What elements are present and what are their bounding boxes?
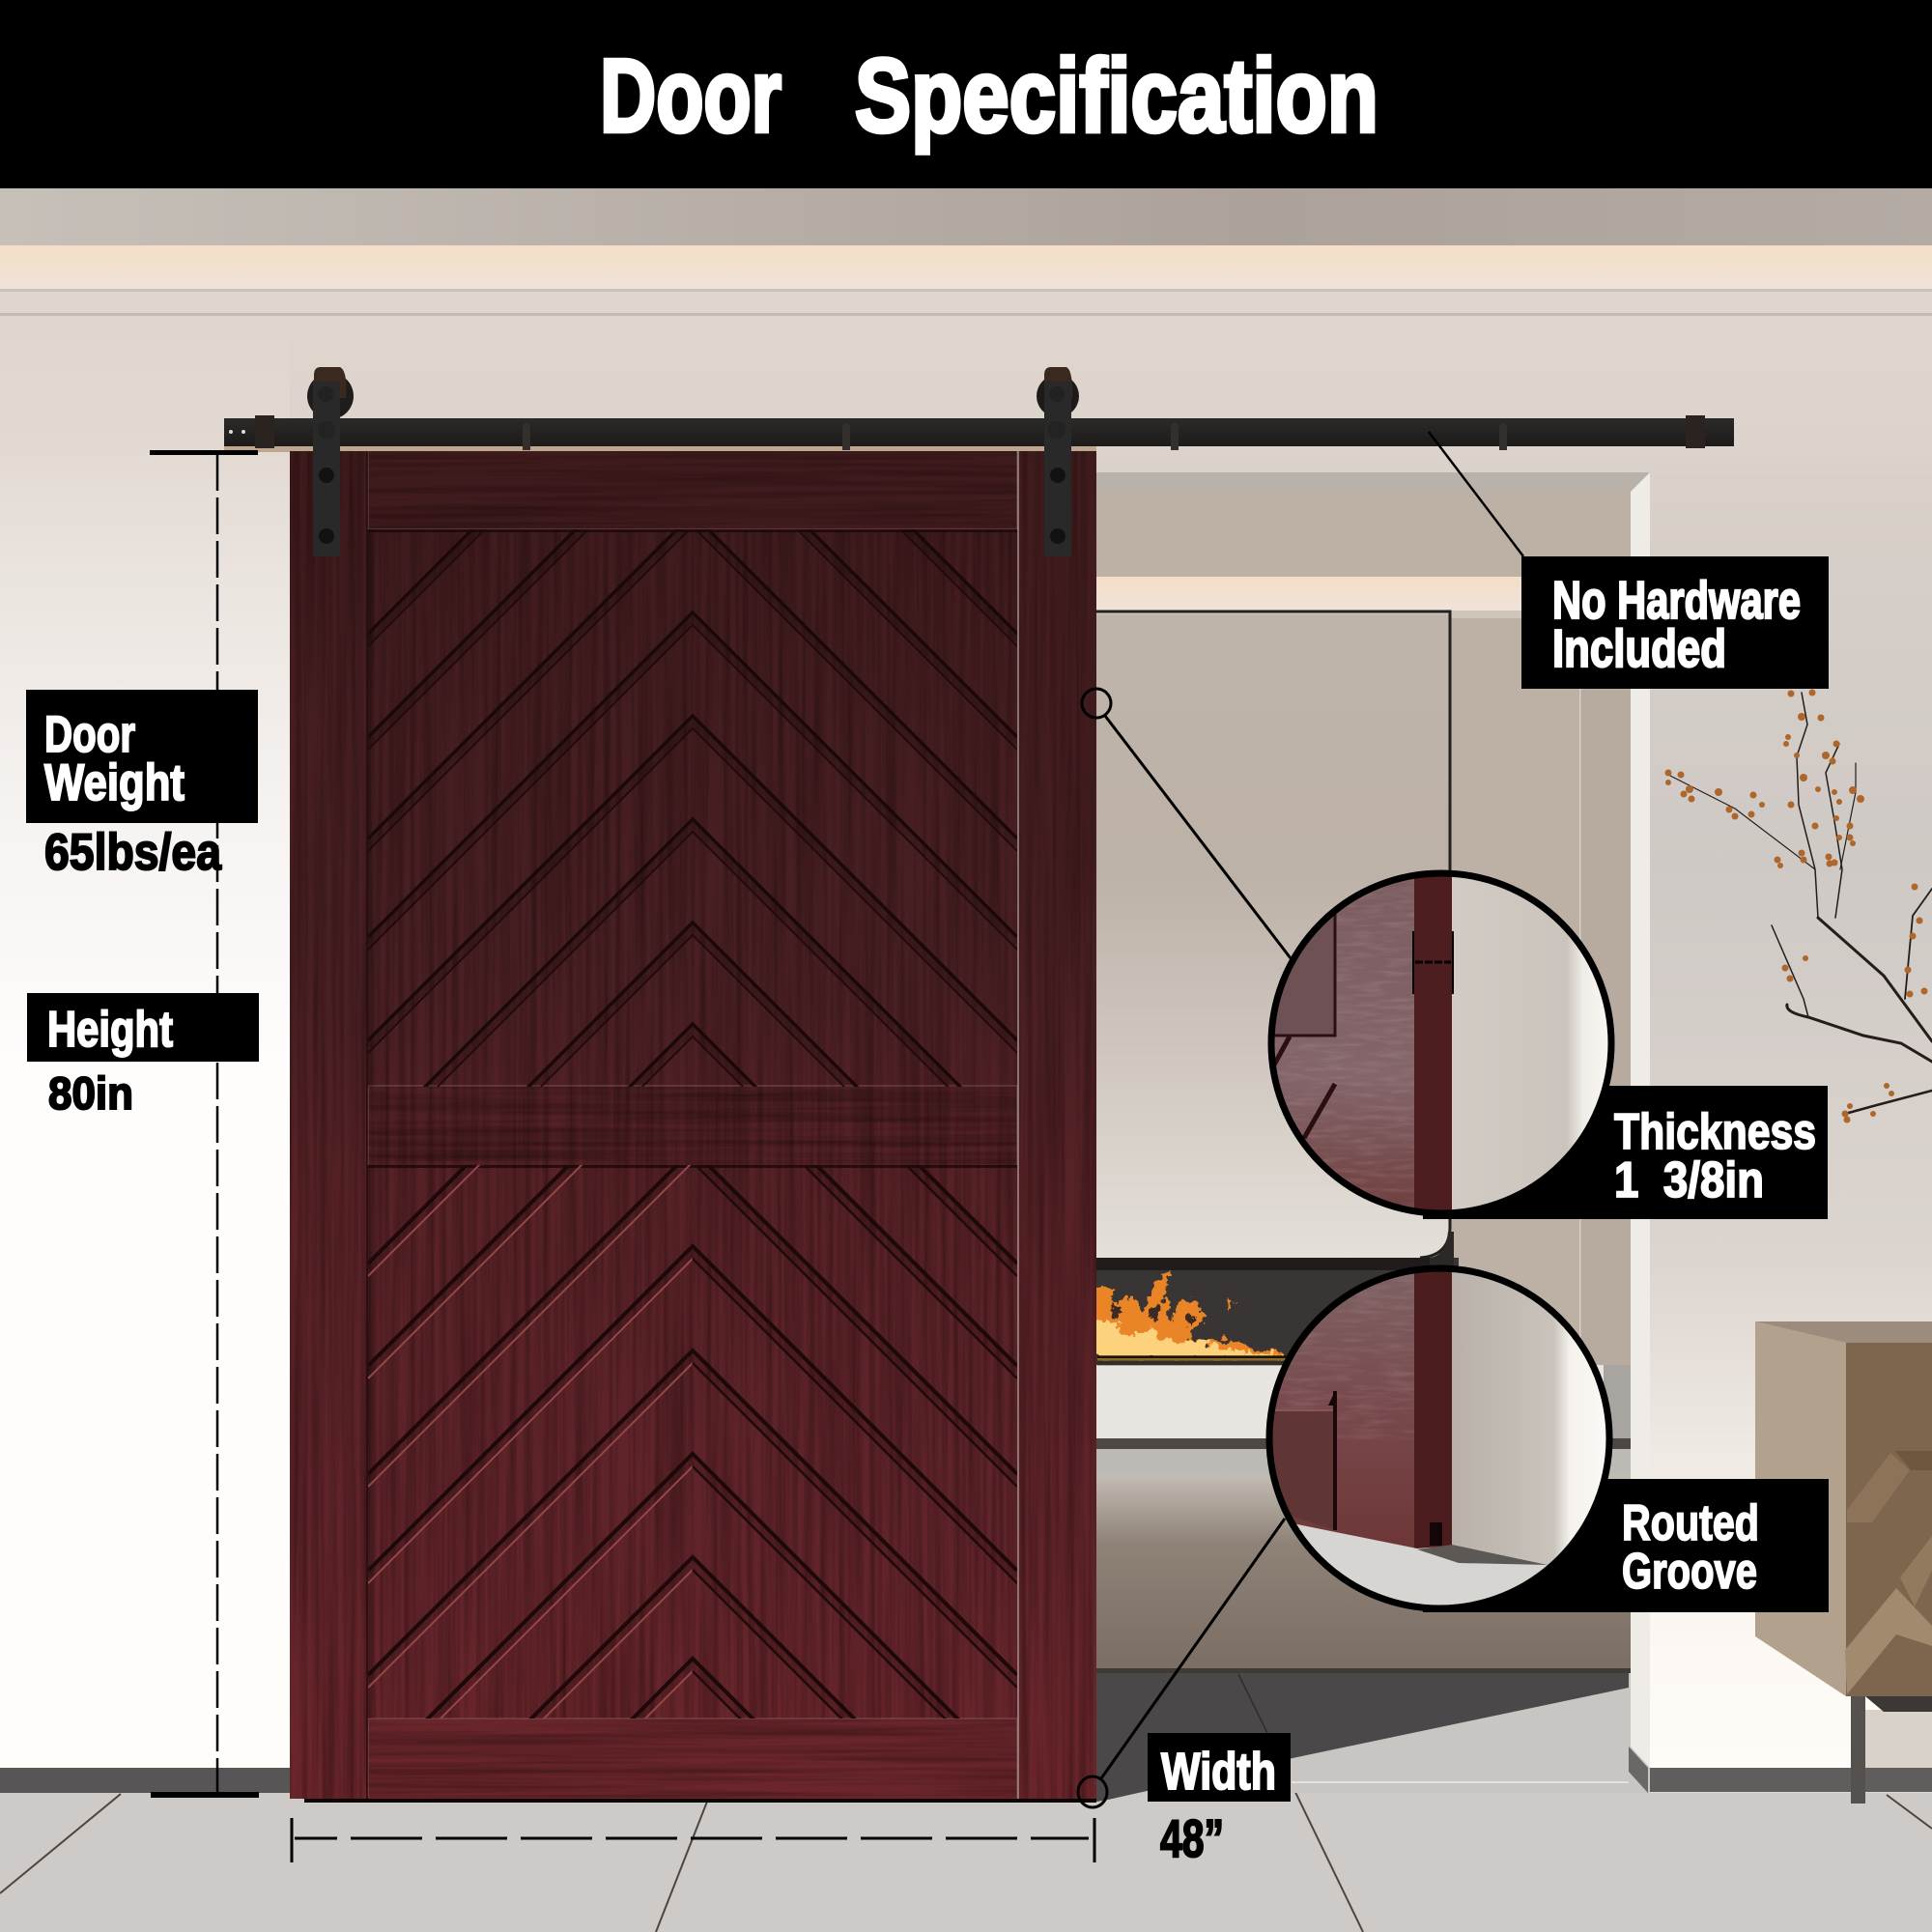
- title: Door: [600, 37, 781, 154]
- door: [224, 446, 1096, 1803]
- herringbone grooves lower panel: [368, 1165, 1017, 1719]
- stile shadows: [366, 451, 1019, 1799]
- label: door weight: 65lbs/ea: [44, 824, 221, 881]
- label: door weight: [26, 690, 258, 881]
- rail stop right: [1686, 415, 1705, 448]
- door wood slab: [290, 451, 1096, 1799]
- callout marker: groove point: [1078, 1519, 1285, 1807]
- barn door track rail: [224, 415, 1734, 450]
- label: width: 48”: [1160, 1808, 1224, 1868]
- label: door weight: Weight: [44, 754, 185, 811]
- door hanger left: [307, 367, 354, 556]
- width dimension line: [290, 1818, 1095, 1862]
- label: door weight: Door: [44, 706, 135, 763]
- vertical grain: [290, 451, 1096, 1799]
- callout marker: thickness point: [1082, 689, 1291, 958]
- horizontal rails: [368, 451, 1017, 1798]
- callout line: no hardware: [1429, 432, 1523, 556]
- wall bolts: [523, 423, 1507, 450]
- title: Specification: [855, 37, 1378, 154]
- plant: branches with berries: [1665, 690, 1932, 1122]
- label: thickness: Thickness: [1614, 1104, 1816, 1160]
- door hanger right: [1037, 367, 1079, 556]
- herringbone grooves upper panel: [368, 529, 1017, 1087]
- title: [600, 37, 1378, 154]
- height dimension line: [150, 450, 259, 1798]
- label: routed groove: [1423, 1479, 1829, 1612]
- rail stop left: [255, 415, 274, 448]
- cabinet: [1755, 1321, 1932, 1804]
- label: no hardware included: [1521, 556, 1829, 689]
- label: no hardware included: Included: [1552, 618, 1726, 678]
- label: routed groove: Groove: [1622, 1544, 1757, 1600]
- label: height: [27, 993, 259, 1119]
- magnifier circle: thickness detail: [1265, 869, 1616, 1217]
- label: height: Height: [47, 1002, 173, 1058]
- room opening behind the door: [1092, 472, 1650, 1803]
- label: thickness: 1 3/8in: [1614, 1152, 1764, 1208]
- label: routed groove: Routed: [1622, 1495, 1759, 1551]
- fireplace flames: [1092, 1272, 1288, 1365]
- header bar: [0, 0, 1932, 188]
- label: width: Width: [1161, 1743, 1276, 1801]
- magnifier circle: routed groove detail: [1265, 1265, 1623, 1623]
- label: height: 80in: [48, 1067, 133, 1119]
- label: no hardware included: No Hardware: [1552, 570, 1801, 630]
- label: thickness: [1423, 1086, 1828, 1219]
- label: width: [1148, 1733, 1291, 1868]
